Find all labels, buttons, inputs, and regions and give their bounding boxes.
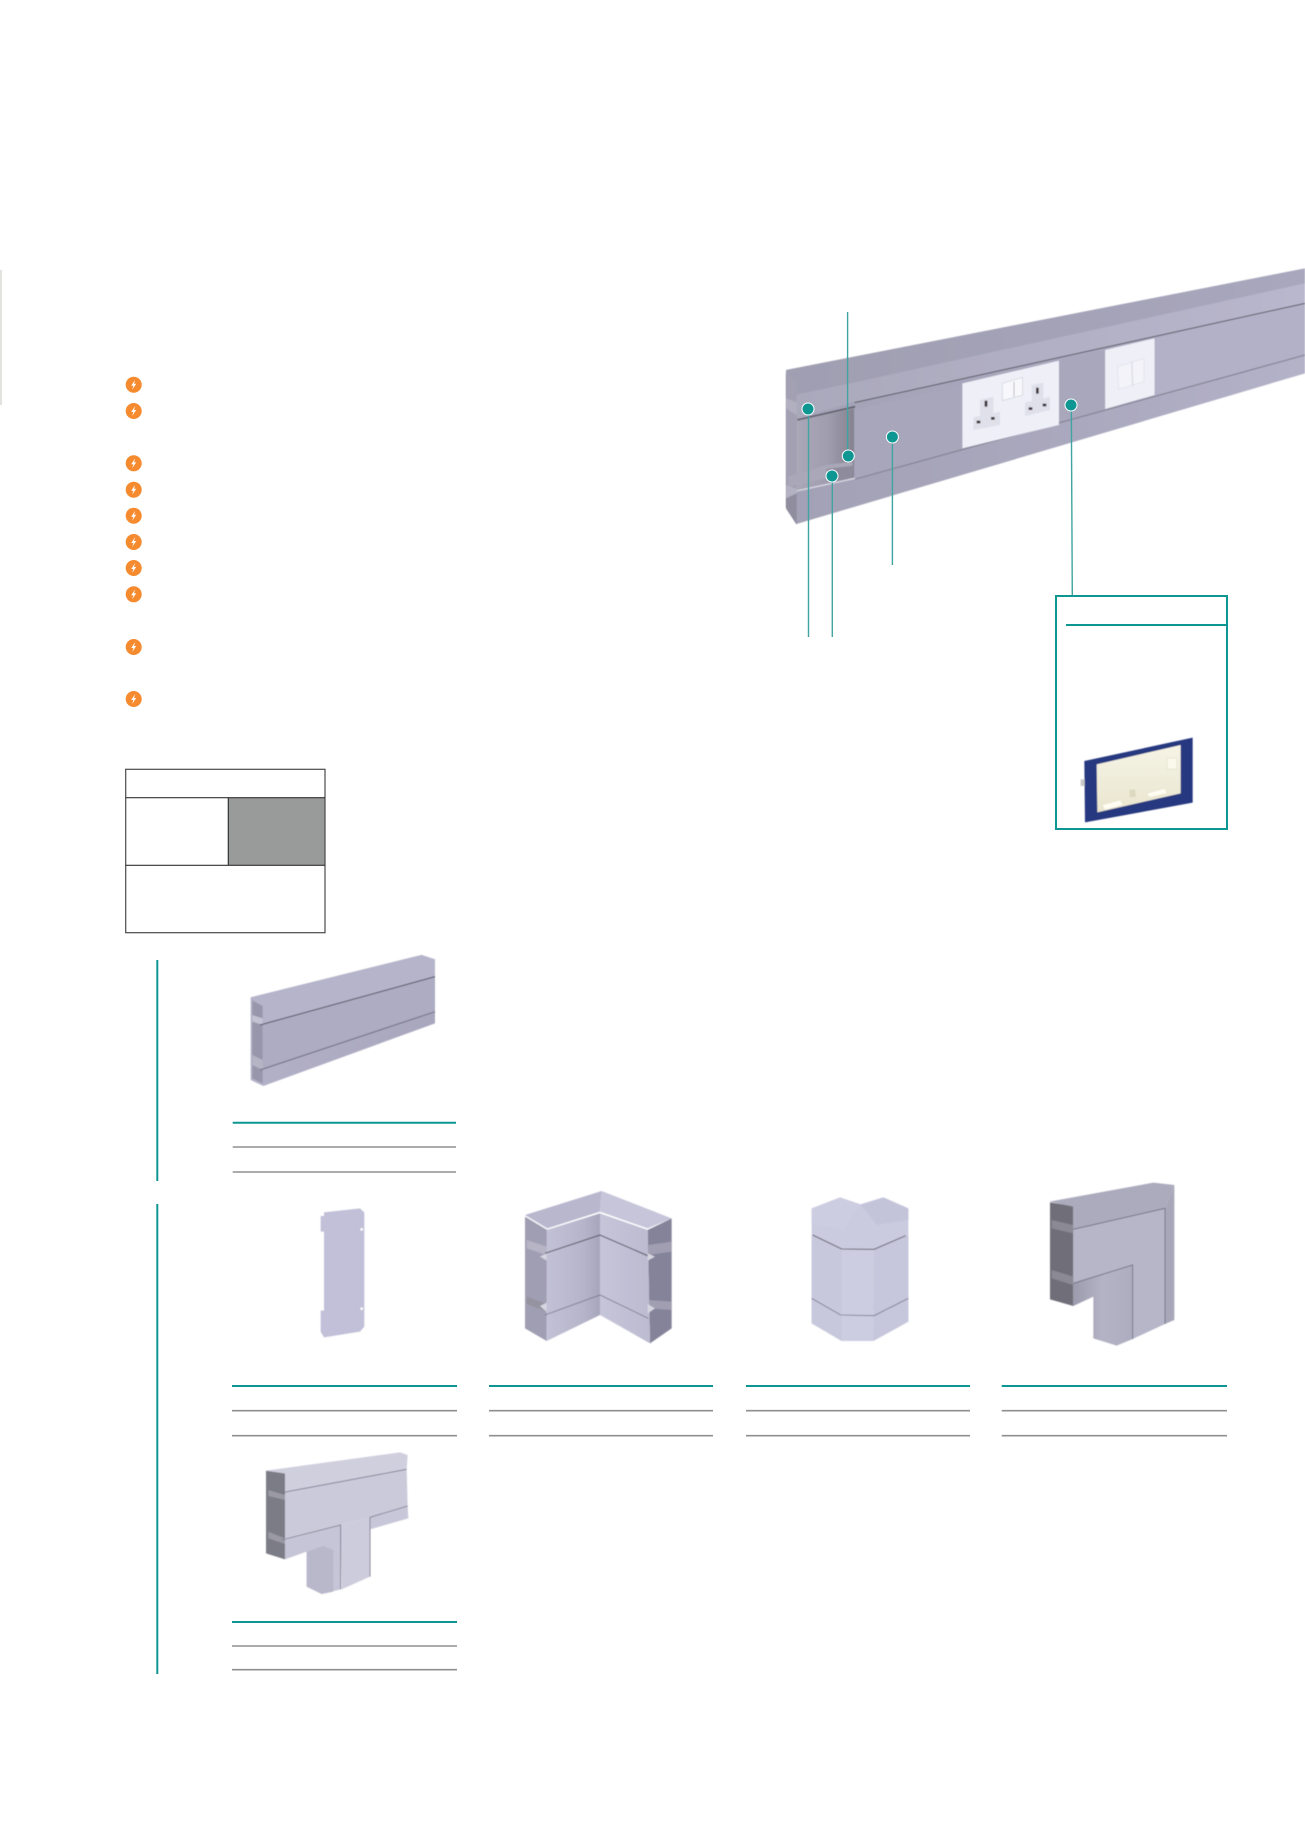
icon: bullet 7 <box>126 560 142 576</box>
open trunking end <box>786 373 855 525</box>
product: internal angle <box>525 1191 672 1343</box>
spec table: end cap <box>232 1386 457 1436</box>
callout lines <box>808 312 1072 637</box>
panel: back box callout <box>1056 596 1227 829</box>
section rule: accessories <box>156 1204 158 1674</box>
icon: bullet 3 <box>126 455 142 471</box>
left edge strip <box>0 270 2 405</box>
spec table: flat angle <box>1002 1386 1227 1436</box>
spec table: tee <box>232 1622 457 1670</box>
switch plate <box>1105 338 1155 409</box>
icon: bullet 2 <box>126 403 142 419</box>
spec table: external angle <box>746 1386 970 1436</box>
icon: blue back box <box>1081 738 1193 822</box>
icon: bullet 9 <box>126 639 142 655</box>
icon: bullet 4 <box>126 482 142 498</box>
bullet icons <box>126 377 142 707</box>
product: external angle <box>812 1197 908 1341</box>
spec table: internal angle <box>489 1386 713 1436</box>
product: end cap <box>321 1208 364 1337</box>
icon: bullet 5 <box>126 508 142 524</box>
icon: bullet 6 <box>126 534 142 550</box>
section rule: trunking <box>156 960 158 1181</box>
callout dots <box>802 399 1077 482</box>
icon: bullet 10 <box>126 691 142 707</box>
spec table: trunking <box>233 1123 456 1172</box>
product: tee <box>266 1452 408 1594</box>
main trunking photo <box>786 268 1305 525</box>
icon: bullet 1 <box>126 377 142 393</box>
product: flat angle <box>1049 1183 1174 1346</box>
socket plate <box>962 361 1059 448</box>
icon: bullet 8 <box>126 586 142 602</box>
product: trunking length <box>251 955 435 1086</box>
table: colour grid <box>126 769 325 933</box>
